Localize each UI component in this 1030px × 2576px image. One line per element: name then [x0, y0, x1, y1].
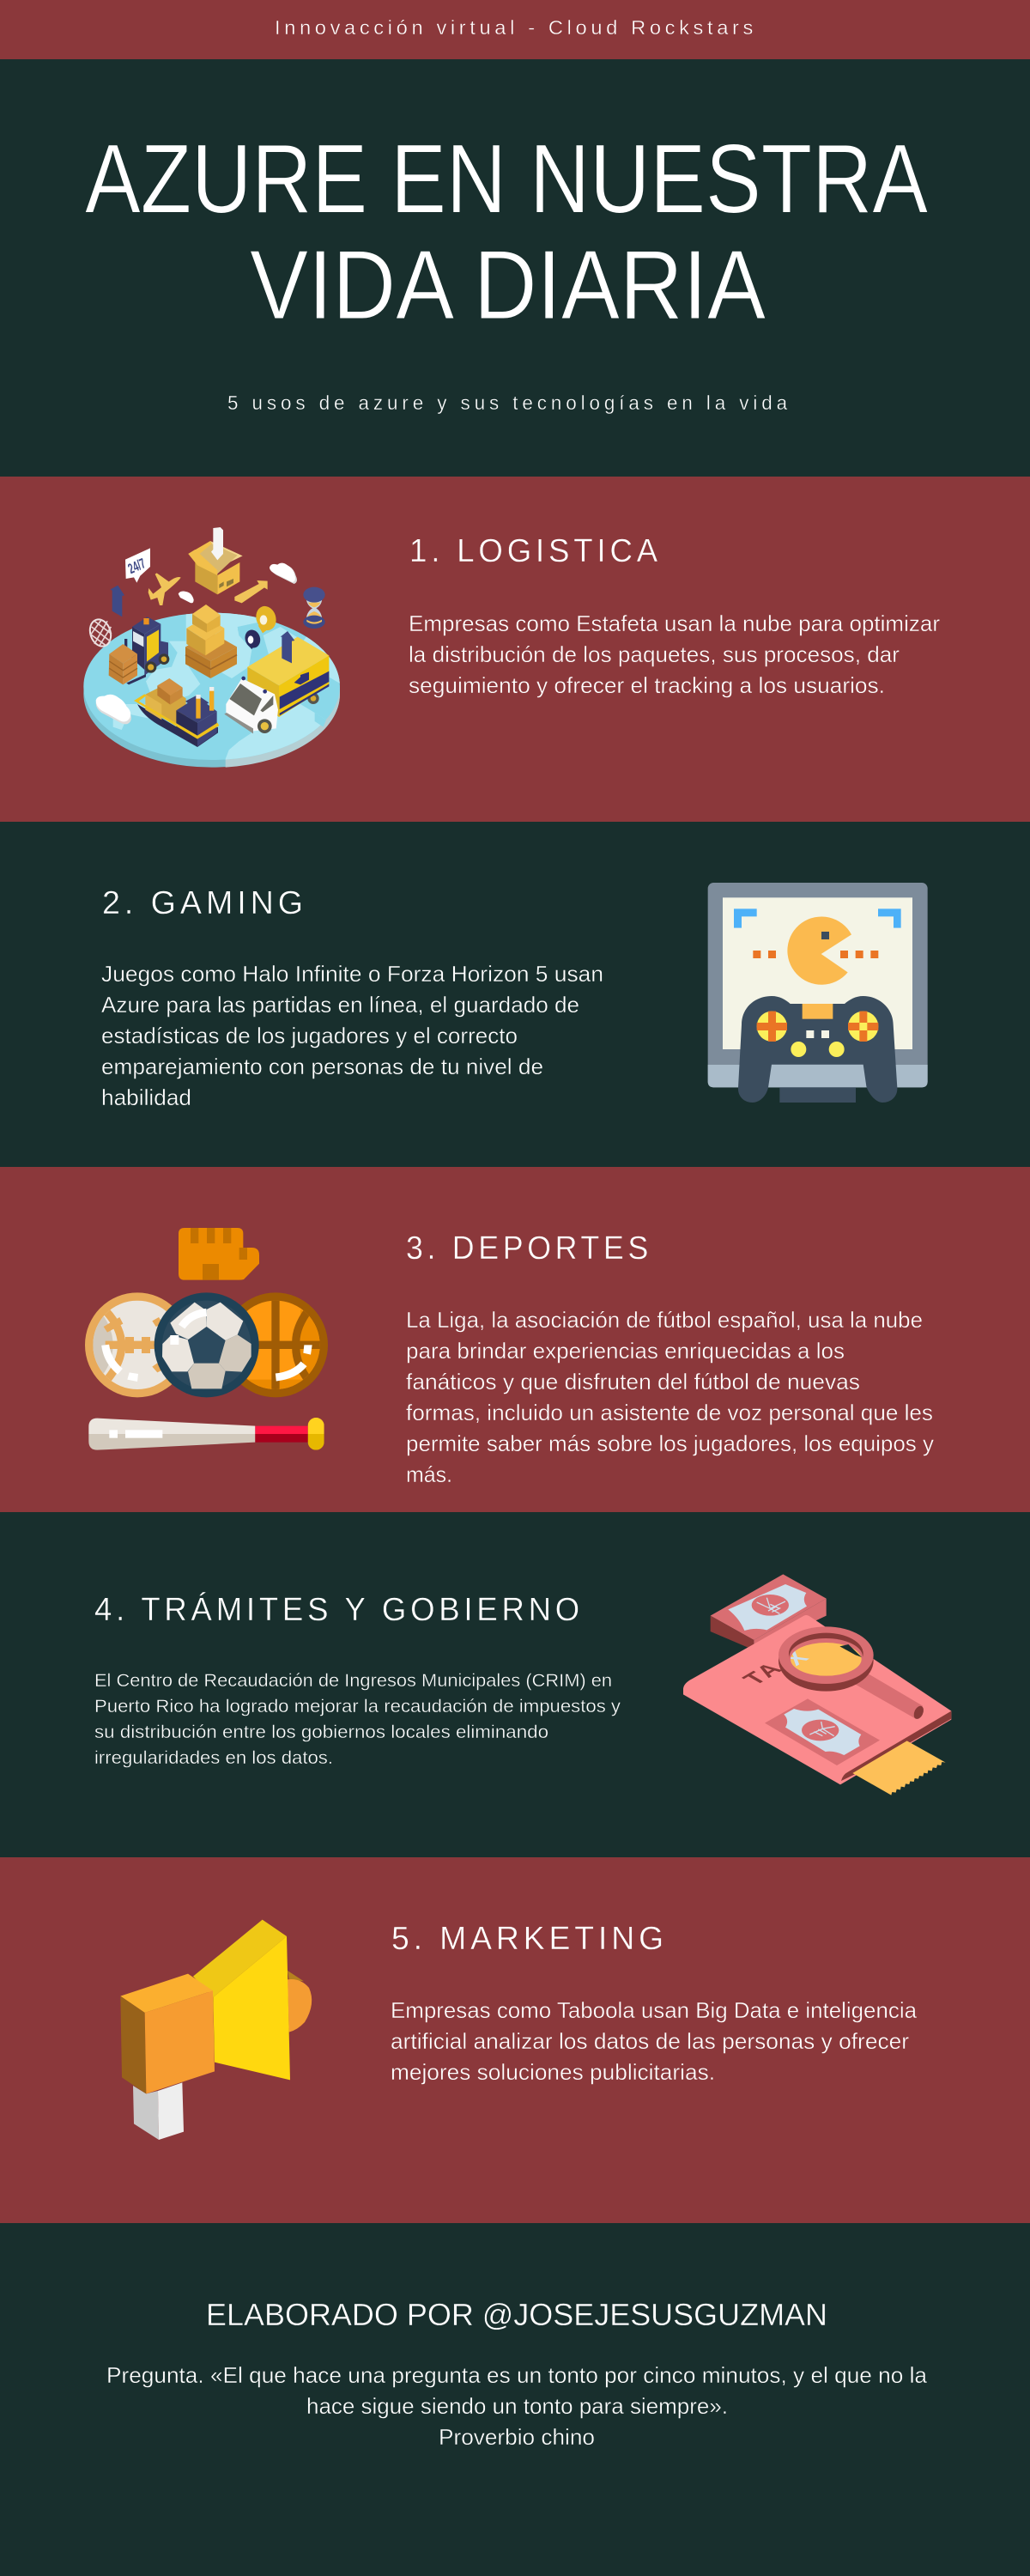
text: gaming: Azure para las partidas en línea, el guardado de [101, 993, 579, 1018]
footer quote [106, 2364, 928, 2450]
text: tramites y gobierno: Puerto Rico ha logrado mejorar la recaudación de impuestos y [94, 1696, 621, 1716]
globe [87, 617, 114, 649]
text: tramites y gobierno: El Centro de Recaudación de Ingresos Municipales (CRIM) en [94, 1670, 612, 1691]
text: gaming: Juegos como Halo Infinite o Forza Horizon 5 usan [101, 963, 603, 987]
icon: game monitor and controller [708, 883, 928, 1103]
forklift [132, 617, 161, 634]
icon: sports equipment [85, 1228, 328, 1450]
pins [253, 604, 279, 633]
hourglass [306, 598, 322, 621]
text: marketing [391, 1999, 918, 2085]
icon: tax document and magnifier [683, 1574, 951, 1795]
text: deportes [406, 1309, 934, 1487]
title [85, 125, 928, 340]
text: deportes: para brindar experiencias enriquecidas a los [406, 1340, 845, 1364]
truck [307, 693, 319, 704]
footer [106, 2297, 928, 2450]
yellow arrow [234, 580, 268, 603]
text: marketing: Empresas como Taboola usan Big Data e inteligencia [391, 1999, 918, 2023]
text: deportes: formas, incluido un asistente de voz personal que les [406, 1401, 933, 1425]
central stack [185, 633, 237, 661]
text: tramites y gobierno: su distribución entre los gobiernos locales eliminando [94, 1722, 548, 1742]
text: gaming: estadísticas de los jugadores y el correcto [101, 1024, 518, 1048]
heading: deportes: 3. DEPORTES [406, 1230, 652, 1267]
footer quote: Proverbio chino [439, 2426, 595, 2450]
icon: tax document and magnifier: X [778, 1648, 814, 1669]
footer quote: hace sigue siendo un tonto para siempre». [306, 2395, 728, 2419]
icon: tax document and magnifier: TA [736, 1658, 790, 1688]
text: gaming [101, 963, 603, 1110]
open box [188, 541, 221, 568]
heading: tramites y gobierno: 4. TRÁMITES Y GOBIERNO [94, 1591, 584, 1628]
ship [137, 704, 218, 747]
plane [148, 573, 181, 605]
heading: gaming: 2. GAMING [102, 885, 307, 921]
panel: logistica [0, 477, 1030, 822]
text: deportes: La Liga, la asociación de fútbol español, usa la nube [406, 1309, 923, 1333]
top banner: Innovacción virtual - Cloud Rockstars [275, 16, 757, 39]
icon: isometric logistics world: 24/7 [125, 555, 148, 577]
text: marketing: mejores soluciones publicitarias. [391, 2061, 715, 2085]
sign 24/7 [125, 548, 150, 583]
text: marketing: artificial analizar los datos de las personas y ofrecer [391, 2030, 909, 2054]
text: logistica: la distribución de los paquetes, sus procesos, dar [409, 643, 900, 667]
text: logistica: seguimiento y ofrecer el tracking a los usuarios. [409, 674, 885, 698]
text: gaming: habilidad [101, 1086, 191, 1110]
panel: gaming [101, 883, 928, 1110]
icon: megaphone [120, 1920, 312, 2140]
panel: deportes [0, 1167, 1030, 1512]
footer quote: Pregunta. «El que hace una pregunta es un tonto por cinco minutos, y el que no la [106, 2364, 928, 2388]
heading: logistica: 1. LOGISTICA [409, 533, 662, 569]
clouds [96, 696, 131, 724]
subtitle: 5 usos de azure y sus tecnologías en la vida [227, 392, 791, 414]
panel: tramites y gobierno [94, 1574, 951, 1795]
panel: marketing [0, 1857, 1030, 2223]
text: logistica [409, 612, 940, 698]
title: VIDA DIARIA [250, 231, 766, 340]
text: deportes: permite saber más sobre los jugadores, los equipos y [406, 1432, 934, 1456]
heading: marketing: 5. MARKETING [391, 1921, 668, 1957]
text: tramites y gobierno: irregularidades en los datos. [94, 1747, 333, 1768]
icon: isometric logistics world [83, 527, 341, 768]
text: logistica: Empresas como Estafeta usan la nube para optimizar [409, 612, 940, 636]
top banner [0, 0, 1030, 59]
footer heading: ELABORADO POR @JOSEJESUSGUZMAN [206, 2297, 827, 2332]
text: deportes: fanáticos y que disfruten del fútbol de nuevas [406, 1370, 860, 1394]
text: deportes: más. [406, 1463, 452, 1487]
navy arrow [110, 586, 124, 617]
text: gaming: emparejamiento con personas de tu nivel de [101, 1055, 543, 1079]
text: tramites y gobierno [94, 1670, 621, 1768]
